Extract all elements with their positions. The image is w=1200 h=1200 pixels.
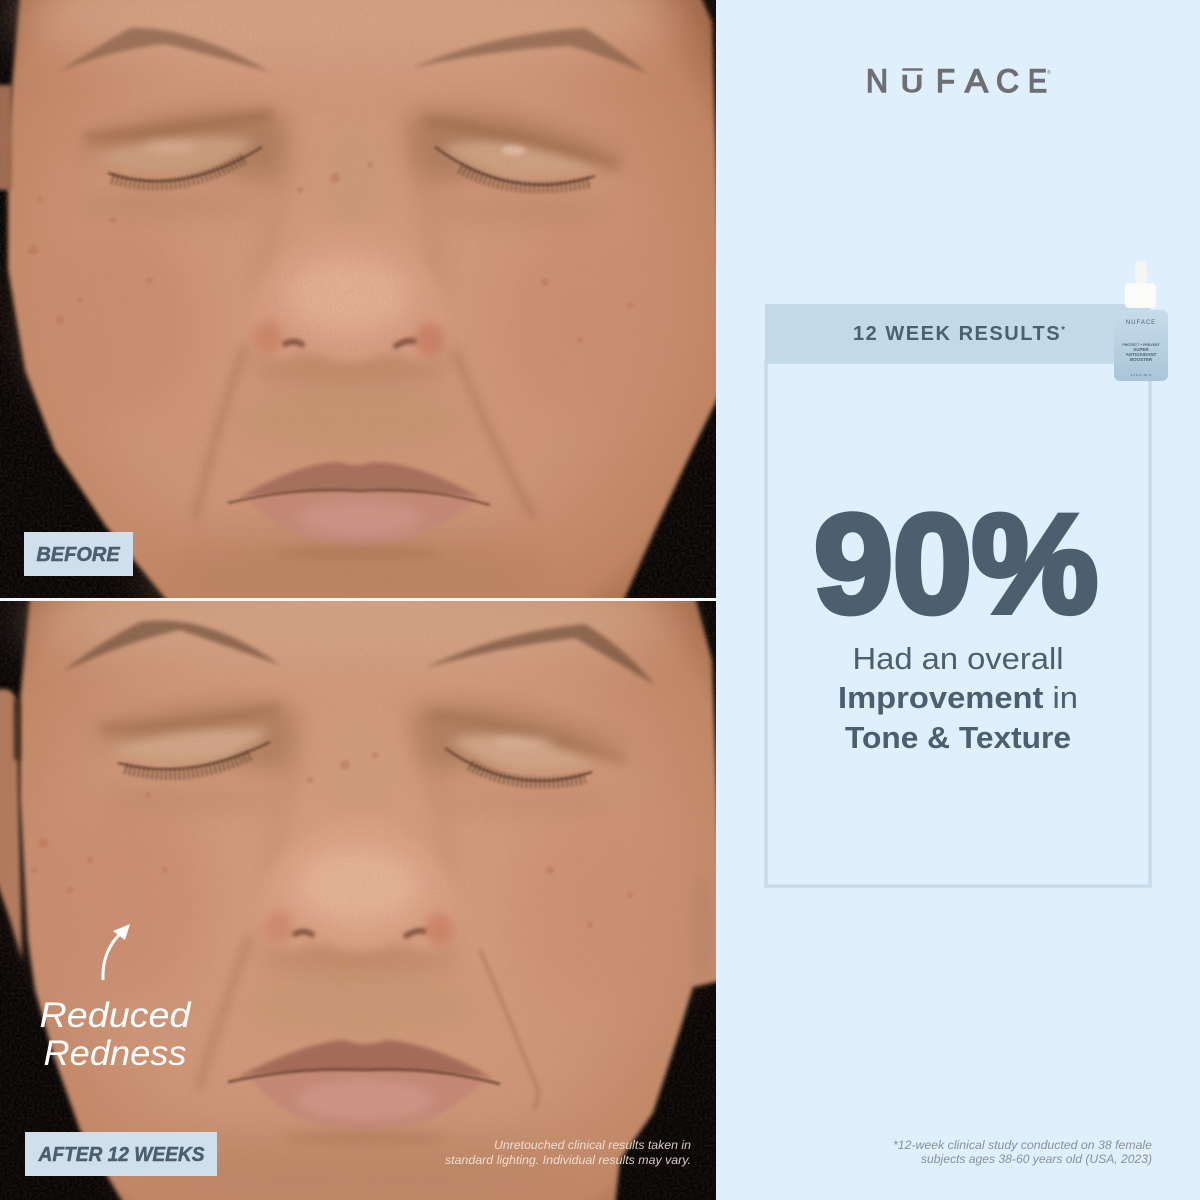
icon: serum bottle: PROTECT + PREVENT bbox=[1122, 343, 1160, 347]
divider between photos bbox=[0, 598, 716, 601]
forehead tone bbox=[20, 0, 680, 65]
stat description: Tone & Texture bbox=[845, 720, 1071, 755]
stat description: Improvement in bbox=[838, 680, 1078, 715]
photo: after bbox=[0, 580, 724, 1200]
disclaimer on photo: standard lighting. Individual results may vary. bbox=[445, 1155, 691, 1167]
logo: NuFACE: N bbox=[866, 63, 888, 99]
logo: NuFACE: U bbox=[901, 71, 923, 98]
eye sockets bbox=[85, 703, 298, 775]
nose bridge shadow bbox=[272, 750, 300, 880]
photo tone bbox=[0, 0, 716, 598]
eyelids bbox=[110, 728, 270, 762]
nasolabial folds bbox=[198, 935, 250, 1090]
cheek redness bbox=[3, 272, 172, 404]
ear sliver bbox=[0, 85, 12, 190]
label: after 12 weeks: AFTER 12 WEEKS bbox=[38, 1144, 205, 1166]
footnote bbox=[893, 1140, 1152, 1166]
panel header: * bbox=[1061, 325, 1065, 336]
panel frame bbox=[766, 362, 1150, 886]
lower face tone bbox=[212, 1134, 524, 1200]
logo: NuFACE: F bbox=[936, 63, 955, 99]
logo: NuFACE: A bbox=[965, 63, 989, 99]
freckles bbox=[28, 162, 633, 343]
lips bbox=[238, 462, 480, 498]
panel: 12 week results bbox=[765, 304, 1150, 886]
skin texture bbox=[0, 601, 716, 1200]
ears bbox=[0, 689, 22, 960]
eyebrows bbox=[62, 620, 655, 685]
callout: reduced redness: Reduced bbox=[40, 996, 192, 1035]
label: before: BEFORE bbox=[36, 544, 120, 566]
photo tone bbox=[0, 601, 716, 1200]
icon: serum bottle: ANTIOXIDANT bbox=[1126, 352, 1157, 357]
cheek redness bbox=[20, 832, 186, 974]
eye crease bbox=[100, 707, 280, 728]
logo: NuFACE: C bbox=[996, 63, 1019, 99]
nose bbox=[253, 944, 463, 972]
disclaimer on photo: Unretouched clinical results taken in bbox=[494, 1140, 691, 1152]
callout: reduced redness bbox=[40, 996, 192, 1073]
panel header bbox=[765, 304, 1150, 362]
eyelashes bbox=[108, 147, 595, 188]
icon: serum bottle: SUPER bbox=[1133, 347, 1149, 352]
eye crease bbox=[85, 114, 272, 138]
disclaimer on photo bbox=[445, 1140, 691, 1167]
arrow: pointing at cheek bbox=[103, 924, 130, 980]
stat description: Had an overall bbox=[852, 641, 1064, 676]
logo: NuFACE bbox=[866, 63, 1051, 99]
icon: serum bottle: NUFACE bbox=[1126, 320, 1156, 326]
big stat: 90% bbox=[814, 485, 1098, 642]
freckles bbox=[31, 752, 633, 928]
footnote: subjects ages 38-60 years old (USA, 2023) bbox=[921, 1154, 1152, 1166]
stat description bbox=[838, 641, 1078, 755]
icon: serum bottle bbox=[1114, 261, 1168, 381]
label: after 12 weeks bbox=[25, 1132, 217, 1176]
eyelashes bbox=[118, 742, 592, 783]
nose bbox=[245, 354, 455, 382]
eyelids bbox=[92, 137, 255, 172]
forehead tone bbox=[4, 601, 672, 659]
callout: reduced redness: Redness bbox=[44, 1034, 186, 1073]
eyebrows bbox=[58, 28, 648, 74]
footnote: *12-week clinical study conducted on 38 female bbox=[893, 1140, 1152, 1152]
label: before bbox=[24, 532, 133, 576]
logo: NuFACE: ® bbox=[1047, 69, 1051, 76]
panel header: 12 WEEK RESULTS bbox=[853, 323, 1060, 345]
nasolabial folds bbox=[195, 345, 245, 520]
lower face tone bbox=[131, 531, 513, 598]
icon: serum bottle: 1.0 fl oz / 30 ml bbox=[1131, 373, 1152, 377]
photo: before bbox=[0, 0, 724, 615]
lips bbox=[238, 1040, 492, 1078]
nose bridge shadow bbox=[262, 160, 290, 290]
eye sockets bbox=[72, 110, 289, 185]
skin texture bbox=[0, 0, 716, 598]
logo: NuFACE: E bbox=[1028, 63, 1047, 99]
icon: serum bottle: BOOSTER bbox=[1130, 357, 1153, 362]
